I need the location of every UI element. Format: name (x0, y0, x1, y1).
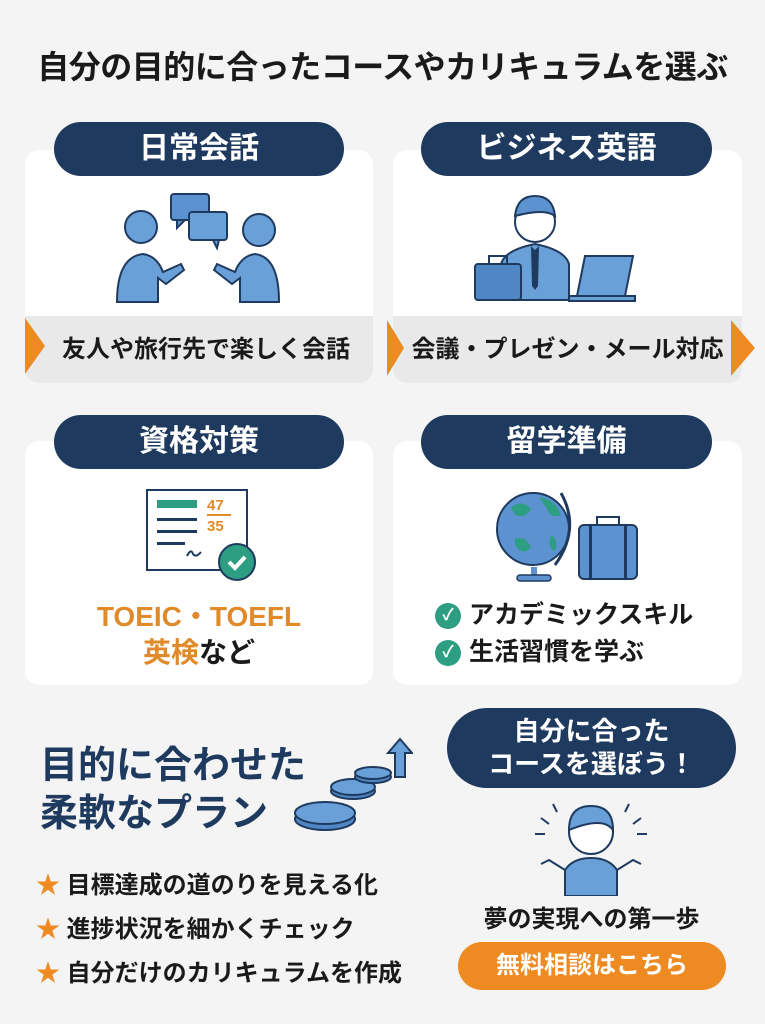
callout pill: choose course: 自分に合った (513, 716, 670, 746)
callout pill: choose course (447, 708, 736, 788)
heading pill: study abroad: 留学準備 (506, 425, 626, 458)
icon: test sheet (146, 489, 256, 581)
list: plan features (36, 872, 402, 987)
title: 自分の目的に合ったコースやカリキュラムを選ぶ (37, 49, 728, 85)
checklist: ✓ (442, 644, 454, 661)
caption band (393, 316, 742, 383)
heading: flexible plan: 柔軟なプラン (40, 793, 268, 835)
arrow: orange (25, 318, 45, 374)
caption band (25, 316, 373, 383)
heading pill: business english: ビジネス英語 (476, 132, 656, 165)
heading: flexible plan: 目的に合わせた (40, 745, 306, 787)
panel: certification (25, 441, 373, 685)
text: first step: 夢の実現への第一歩 (484, 906, 700, 933)
list: plan features: ★ 自分だけのカリキュラムを作成 (36, 960, 402, 987)
button: free consultation (458, 942, 726, 990)
arrow: right orange (731, 320, 755, 376)
icon: conversation (116, 193, 280, 303)
heading pill: daily conversation: 日常会話 (139, 132, 259, 165)
text: exams (97, 601, 301, 668)
arrow: left orange (387, 320, 404, 376)
panel: daily conversation (25, 150, 373, 383)
text: exams: TOEIC・TOEFL (97, 601, 301, 632)
heading pill: study abroad (421, 415, 712, 469)
checklist (435, 601, 693, 666)
heading pill: certification: 資格対策 (139, 425, 259, 458)
icon: test sheet: 47 (207, 497, 224, 514)
caption band: 会議・プレゼン・メール対応 (412, 336, 724, 363)
heading: flexible plan (40, 745, 306, 835)
heading pill: business english (421, 122, 712, 176)
caption band: 友人や旅行先で楽しく会話 (62, 336, 350, 363)
icon: happy person (535, 804, 647, 896)
icon: businessman (474, 195, 636, 302)
checklist: アカデミックスキル (469, 601, 693, 629)
heading pill: daily conversation (54, 122, 344, 176)
icon: test sheet: 35 (207, 518, 224, 535)
checklist: 生活習慣を学ぶ (469, 638, 644, 666)
panel: study abroad (393, 441, 742, 685)
icon: globe and suitcase (496, 492, 638, 582)
checklist: ✓ (442, 607, 454, 624)
list: plan features: ★ 進捗状況を細かくチェック (36, 916, 355, 943)
icon: coin steps with arrow (294, 738, 413, 831)
heading pill: certification (54, 415, 344, 469)
button: free consultation: 無料相談はこちら (496, 952, 688, 979)
text: exams: 英検など (143, 637, 255, 668)
callout pill: choose course: コースを選ぼう！ (488, 749, 695, 779)
panel: business english (393, 150, 742, 383)
list: plan features: ★ 目標達成の道のりを見える化 (36, 872, 378, 899)
